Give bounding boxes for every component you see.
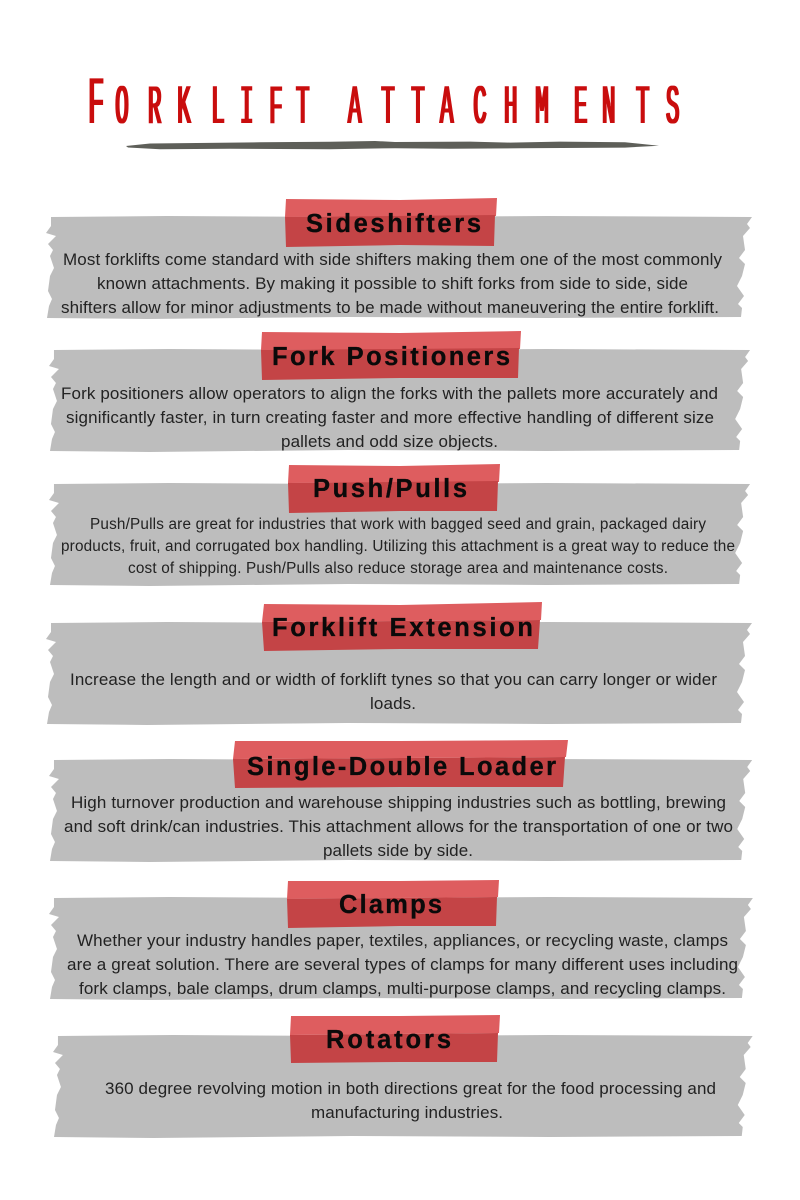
text: push/pulls: Push/Pulls are great for industries that work with bagged seed and grain, packaged dairy [90, 516, 706, 533]
heading: rotators: Rotators [326, 1026, 451, 1054]
text: single-double loader: and soft drink/can industries. This attachment allows for the transportation of one or two [64, 817, 733, 836]
text: push/pulls: products, fruit, and corrugated box handling. Utilizing this attachment is a great way to reduce the [61, 538, 735, 555]
panel: single-double loader [49, 740, 752, 862]
heading: single-double loader: Single-Double Loader [247, 753, 556, 781]
text: forklift extension [70, 670, 717, 713]
heading: clamps: Clamps [339, 891, 442, 919]
panel: push/pulls [49, 464, 750, 586]
text: sideshifters [61, 250, 722, 317]
text: fork positioners: significantly faster, in turn creating faster and more effective handling of different size [66, 408, 714, 427]
title: F [88, 67, 104, 144]
text: rotators [105, 1079, 716, 1122]
title underline brush stroke [126, 141, 659, 149]
text: rotators: 360 degree revolving motion in both directions great for the food processing and [105, 1079, 716, 1098]
text: push/pulls: cost of shipping. Push/Pulls also reduce storage area and maintenance costs. [128, 560, 668, 577]
panel: sideshifters [46, 198, 752, 319]
heading: push/pulls: Push/Pulls [313, 475, 467, 503]
text: fork positioners [61, 384, 718, 451]
heading banner: single-double loader [233, 740, 568, 788]
panel background: rotators [53, 1035, 753, 1138]
panel background: forklift extension [46, 622, 752, 725]
text: clamps: fork clamps, bale clamps, drum clamps, multi-purpose clamps, and recycling clamps. [79, 979, 726, 998]
text: forklift extension: Increase the length and or width of forklift tynes so that you can carry longer or wider [70, 670, 717, 689]
text: push/pulls [61, 516, 735, 577]
title: ORKLIFT ATTACHMENTS [115, 77, 679, 140]
heading banner: clamps [287, 880, 499, 928]
panel background: single-double loader [49, 759, 752, 862]
text: sideshifters: Most forklifts come standard with side shifters making them one of the most commonly [63, 250, 722, 269]
panel: clamps [49, 880, 753, 1000]
panel background: fork positioners [49, 349, 750, 452]
text: clamps [67, 931, 738, 998]
text: forklift extension: loads. [370, 694, 416, 713]
panel background: push/pulls [49, 483, 750, 586]
panel background: clamps [49, 897, 753, 1000]
text: sideshifters: shifters allow for minor adjustments to be made without maneuvering the entire forklift. [61, 298, 719, 317]
text: clamps: are a great solution. There are several types of clamps for many different uses including [67, 955, 738, 974]
text: fork positioners: pallets and odd size objects. [281, 432, 498, 451]
text: single-double loader: pallets side by side. [323, 841, 473, 860]
panel: fork positioners [49, 331, 750, 452]
heading banner: fork positioners [261, 331, 521, 380]
heading banner: push/pulls [288, 464, 500, 513]
panel background: sideshifters [46, 216, 752, 319]
text: single-double loader: High turnover production and warehouse shipping industries such as bottling, brewing [71, 793, 726, 812]
text: clamps: Whether your industry handles paper, textiles, appliances, or recycling waste, clamps [77, 931, 728, 950]
heading: forklift extension: Forklift Extension [272, 614, 533, 642]
panel: rotators [53, 1015, 753, 1138]
text: single-double loader [64, 793, 733, 860]
heading: fork positioners: Fork Positioners [272, 343, 510, 371]
panel: forklift extension [46, 602, 752, 725]
heading banner: rotators [290, 1015, 500, 1063]
text: sideshifters: known attachments. By making it possible to shift forks from side to side, side [97, 274, 688, 293]
heading banner: sideshifters [285, 198, 497, 247]
heading: sideshifters: Sideshifters [306, 210, 481, 238]
heading banner: forklift extension [262, 602, 542, 651]
text: fork positioners: Fork positioners allow operators to align the forks with the pallets more accurately and [61, 384, 718, 403]
text: rotators: manufacturing industries. [311, 1103, 503, 1122]
